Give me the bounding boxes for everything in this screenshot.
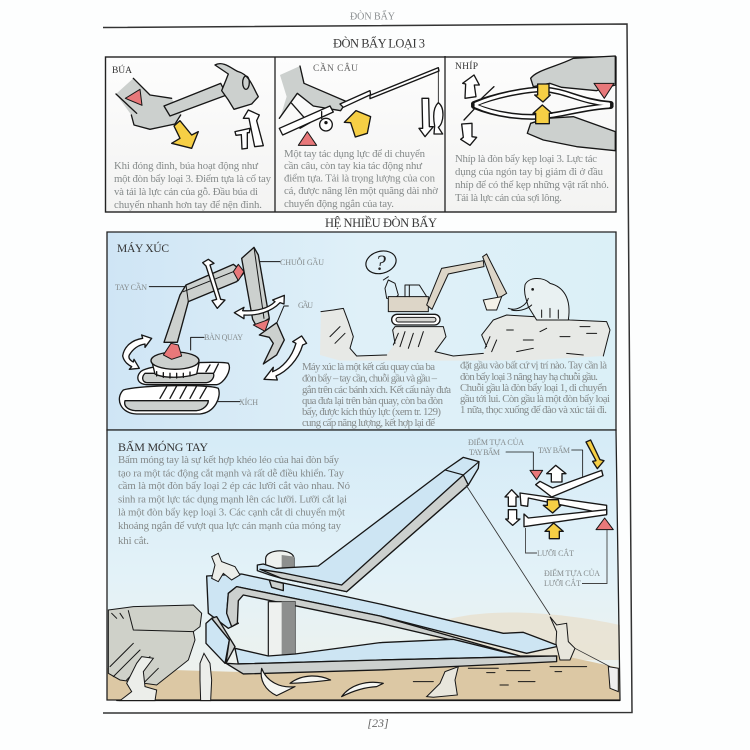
callout labels: excavator parts: XÍCH: [239, 397, 258, 407]
panel: hammer: [112, 64, 272, 211]
text: excavator column 2: đặt gầu vào bất cứ vị trí nào. Tay cần là: [460, 360, 607, 372]
climber: [550, 617, 575, 660]
panel: fishing rod: [279, 61, 443, 210]
text: fishing rod: Một tay tác dụng lực để di chuyển: [284, 148, 426, 160]
text: fishing rod: điểm tựa. Tải là trọng lượng của con: [284, 172, 436, 184]
upper jaw: [207, 574, 557, 653]
icon: tweezers and fingers: [461, 56, 615, 151]
text: excavator column 1: qua đưa lại trên bàn quay, còn ba đòn: [302, 395, 444, 407]
lower jaw: [235, 639, 557, 664]
nail clippings: [261, 668, 383, 697]
arrow: bucket: [264, 336, 307, 380]
arrow: swing: [123, 335, 152, 369]
callout labels: inset: ĐIỂM TỰA CỦA: [544, 568, 600, 578]
text: fishing rod: chuyển động ngắn của tay.: [284, 198, 394, 210]
panel: nail clippers: [107, 430, 620, 701]
text: excavator column 1: gắn trên các bánh xích. Kết cấu này đưa: [302, 384, 451, 396]
text: excavator column 2: đòn bẩy loại 3 nâng hay hạ chuỗi gầu.: [460, 371, 598, 383]
left wedge: [206, 618, 229, 663]
lever handle: [257, 457, 479, 592]
panel: tweezers: [455, 56, 615, 204]
text: excavator column 2: [460, 360, 610, 416]
label: tweezers: NHÍP: [455, 60, 478, 72]
panel: class 3 levers row: [106, 56, 616, 212]
scene: excavator and mammoth: ?: [375, 250, 386, 275]
icon: rod tip, fish and load arrow: [370, 68, 443, 137]
callout labels: excavator parts: [115, 256, 324, 407]
text: tweezers: dụng của ngón tay bị giảm đi ở đầu: [455, 166, 604, 178]
inset diagram: clipper lever system: [505, 440, 613, 539]
text: tweezers: [455, 153, 609, 204]
man pushing upward: [200, 653, 212, 701]
arrow: stick: [234, 295, 284, 319]
text: nail clippers: Bấm móng tay là sự kết hợp khéo léo của hai đòn bẩy: [118, 454, 340, 466]
callout labels: excavator parts: GẦU: [298, 300, 313, 310]
text: nail clippers: cầm là một đòn bẩy loại 2 ép các lưỡi cắt vào nhau. Nó: [118, 480, 350, 492]
lower jaw band: [226, 656, 557, 674]
label: fishing rod: CẦN CÂU: [313, 61, 358, 74]
text: excavator column 1: bẩy, được kích thủy lực (xem tr. 129): [302, 406, 441, 418]
callout leader lines: [526, 528, 607, 584]
icon: hammer and hand: [116, 64, 263, 149]
panel: excavator: [107, 232, 616, 430]
lever under block: [269, 580, 283, 591]
man at boulder: [120, 657, 157, 701]
pivot pin top: [266, 551, 294, 572]
text: hammer: Khi đóng đinh, búa hoạt động như: [114, 160, 259, 172]
text: nail clippers: là một đòn bẩy kẹp loại 3. Các cạnh cắt di chuyển một: [118, 506, 345, 518]
text: fishing rod: [284, 148, 438, 210]
illustration: right-hand figures and ground marks: [413, 485, 618, 697]
running header: ĐÒN BẨY: [350, 10, 395, 22]
text: hammer: một đòn bẩy loại 3. Điểm tựa là cổ tay: [114, 173, 272, 185]
label: hammer: BÚA: [112, 64, 132, 76]
ground: [107, 655, 620, 700]
callout labels: inset: [468, 437, 600, 588]
text: nail clippers: tạo ra một tác động cắt mạnh và rất dễ điều khiển. Tay: [118, 468, 345, 480]
text: hammer: và tải là lực cản của gỗ. Đầu búa di: [114, 186, 258, 198]
heading: nail clippers: BẤM MÓNG TAY: [118, 439, 208, 454]
text: fishing rod: cần câu, còn tay kia tác động như: [284, 160, 423, 172]
callout labels: inset: ĐIỂM TỰA CỦA: [468, 437, 524, 447]
scene: excavator and mammoth: [320, 248, 610, 361]
callout labels: excavator parts: CHUỖI GẦU: [280, 256, 324, 267]
text: fishing rod: cá, được nâng lên một quãng dài nhờ: [284, 185, 438, 197]
callout labels: inset: LƯỠI CẮT: [544, 578, 581, 588]
illustration: giant nail clipper: [108, 457, 620, 701]
text: nail clippers: sinh ra một lực tác dụng mạnh lên các lưỡi. Lưỡi cắt lại: [118, 494, 347, 506]
callout labels: excavator parts: TAY CẦN: [115, 282, 147, 292]
heading: multiple lever systems: HỆ NHIỀU ĐÒN BẨY: [325, 215, 437, 230]
page number: [23]: [367, 716, 389, 730]
text: excavator column 1: đòn bẩy – tay cần, chuỗi gầu và gầu –: [302, 372, 438, 384]
icon: arm and fishing rod: [279, 66, 371, 145]
man on top of clipper: [212, 553, 240, 582]
outer page frame: [103, 24, 632, 713]
text: nail clippers: khoảng ngắn để vượt qua lực cản mạnh của móng tay: [118, 520, 342, 532]
diagram: excavator levers: [119, 247, 307, 414]
old man: [427, 667, 458, 697]
arrow: boom: [203, 259, 225, 308]
upper jaw inner band: [227, 587, 520, 656]
text: excavator column 1: Máy xúc là một kết cấu quay của ba: [302, 361, 435, 373]
text: excavator column 1: [302, 361, 451, 429]
text: tweezers: Nhíp là đòn bẩy kẹp loại 3. Lực tác: [455, 153, 597, 165]
text: hammer: [114, 160, 272, 211]
text: excavator column 2: Chuỗi gầu là đòn bẩy loại 1, di chuyển: [460, 382, 608, 394]
pivot pin shaft: [268, 602, 295, 657]
rope: [466, 485, 610, 667]
text: excavator column 2: gầu tới lui. Còn gầu là một đòn bẩy loại: [460, 393, 610, 405]
bottom line: [117, 699, 620, 702]
text: nail clippers: khi cắt.: [118, 535, 149, 547]
text: tweezers: Tải là lực cản của sợi lông.: [455, 192, 562, 204]
callout labels: excavator parts: BÀN QUAY: [204, 332, 243, 342]
dust haze: [430, 612, 620, 660]
label: excavator: MÁY XÚC: [117, 241, 169, 255]
callout labels: inset: TAY BẤM: [538, 445, 570, 455]
text: excavator column 1: cung cấp năng lượng, kết hợp lại để: [302, 417, 435, 429]
heading: class 3 levers: ĐÒN BẨY LOẠI 3: [333, 36, 425, 50]
text: excavator column 2: 1 nữa, thọc xuống để đào và xúc tải đi.: [460, 404, 607, 416]
text: hammer: chuyển nhanh hơn tay để nện đinh.: [114, 199, 262, 211]
boulder: [108, 605, 202, 685]
rock at right: [608, 667, 618, 692]
text: nail clippers: [118, 454, 350, 547]
callout labels: inset: LƯỠI CẮT: [537, 548, 574, 558]
callout labels: inset: TAY BẤM: [469, 447, 500, 457]
text: tweezers: nhíp để có thể kẹp những vật rất nhỏ.: [455, 179, 609, 191]
